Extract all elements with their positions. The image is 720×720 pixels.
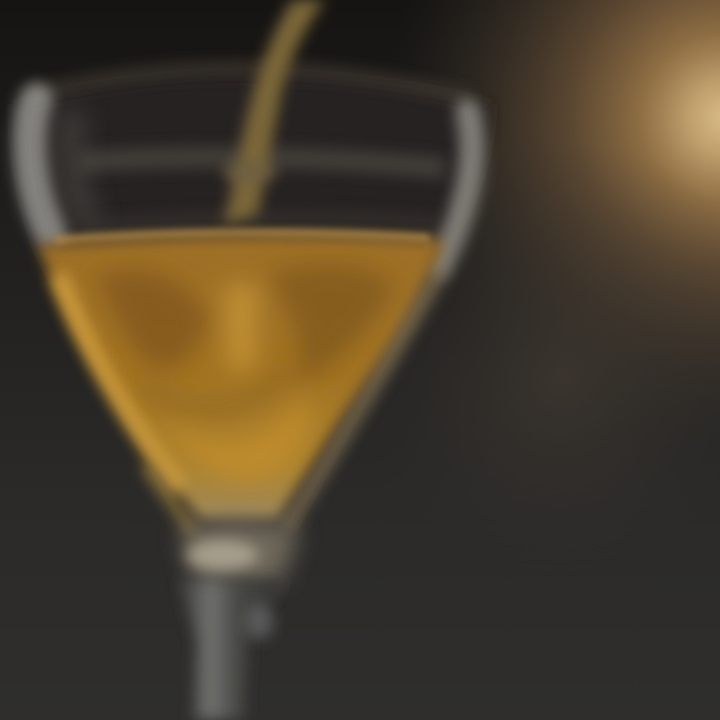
left wall highlight: [30, 100, 50, 232]
wine left edge glow: [58, 275, 180, 490]
poured wine stream: [224, 0, 325, 225]
stem collar: [180, 520, 300, 585]
glass stem: [178, 520, 300, 720]
stem shaft: [178, 580, 285, 720]
lower left edge: [145, 465, 195, 535]
glass upper band: [80, 157, 445, 168]
glass lower band: [80, 217, 440, 226]
left wall tint: [70, 110, 90, 225]
glass bowl: [15, 68, 490, 535]
bowl interior: [15, 75, 490, 530]
wine: [38, 235, 444, 520]
rim highlight: [30, 68, 470, 98]
wine swirl: [95, 265, 395, 479]
right outer edge: [285, 268, 442, 530]
wine surface: [55, 232, 430, 240]
stem highlight: [246, 604, 274, 640]
right wall highlight: [440, 112, 472, 265]
